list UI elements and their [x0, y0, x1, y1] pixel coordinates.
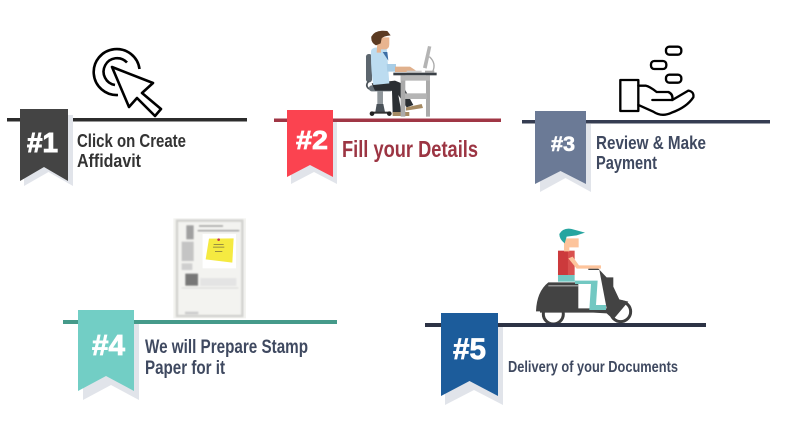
divider line 5 [425, 323, 706, 327]
ribbon 2 [287, 110, 337, 184]
step 5 [425, 229, 706, 405]
icon: stamp paper [173, 218, 246, 318]
text: step 3 label: Review & Make [596, 133, 706, 153]
divider line 4 [63, 320, 337, 324]
icon: scooter rider [536, 229, 631, 324]
text: step 1 label: Click on Create [77, 131, 186, 151]
step 3 [522, 47, 770, 192]
icon: cursor click [94, 49, 161, 116]
text: step 1 label: Affidavit [77, 151, 141, 171]
ribbon 1: #1 [27, 127, 58, 158]
icon: hand with coins [620, 47, 693, 115]
ribbon 2: #2 [296, 125, 328, 155]
divider line 3 [522, 120, 770, 124]
step 2 [274, 31, 501, 184]
ribbon 5 [441, 313, 503, 405]
ribbon 4: #4 [92, 330, 125, 362]
text: step 3 label [596, 133, 706, 173]
ribbon 3 [535, 111, 591, 192]
step 1 [7, 49, 247, 186]
text: step 3 label: Payment [596, 153, 657, 173]
text: step 2 label: Fill your Details [342, 136, 478, 162]
divider line 1 [7, 118, 247, 122]
text: step 4 label: Paper for it [145, 357, 225, 379]
divider line 2 [274, 118, 501, 122]
text: step 1 label [77, 131, 186, 171]
ribbon 4 [78, 310, 139, 400]
ribbon 5: #5 [453, 333, 486, 366]
ribbon 3: #3 [551, 133, 575, 156]
text: step 4 label [145, 336, 308, 379]
step 4 [63, 218, 337, 400]
text: step 4 label: We will Prepare Stamp [145, 336, 308, 358]
text: step 5 label: Delivery of your Documents [508, 359, 678, 376]
icon: person at desk [366, 31, 437, 117]
ribbon 1 [20, 109, 73, 186]
